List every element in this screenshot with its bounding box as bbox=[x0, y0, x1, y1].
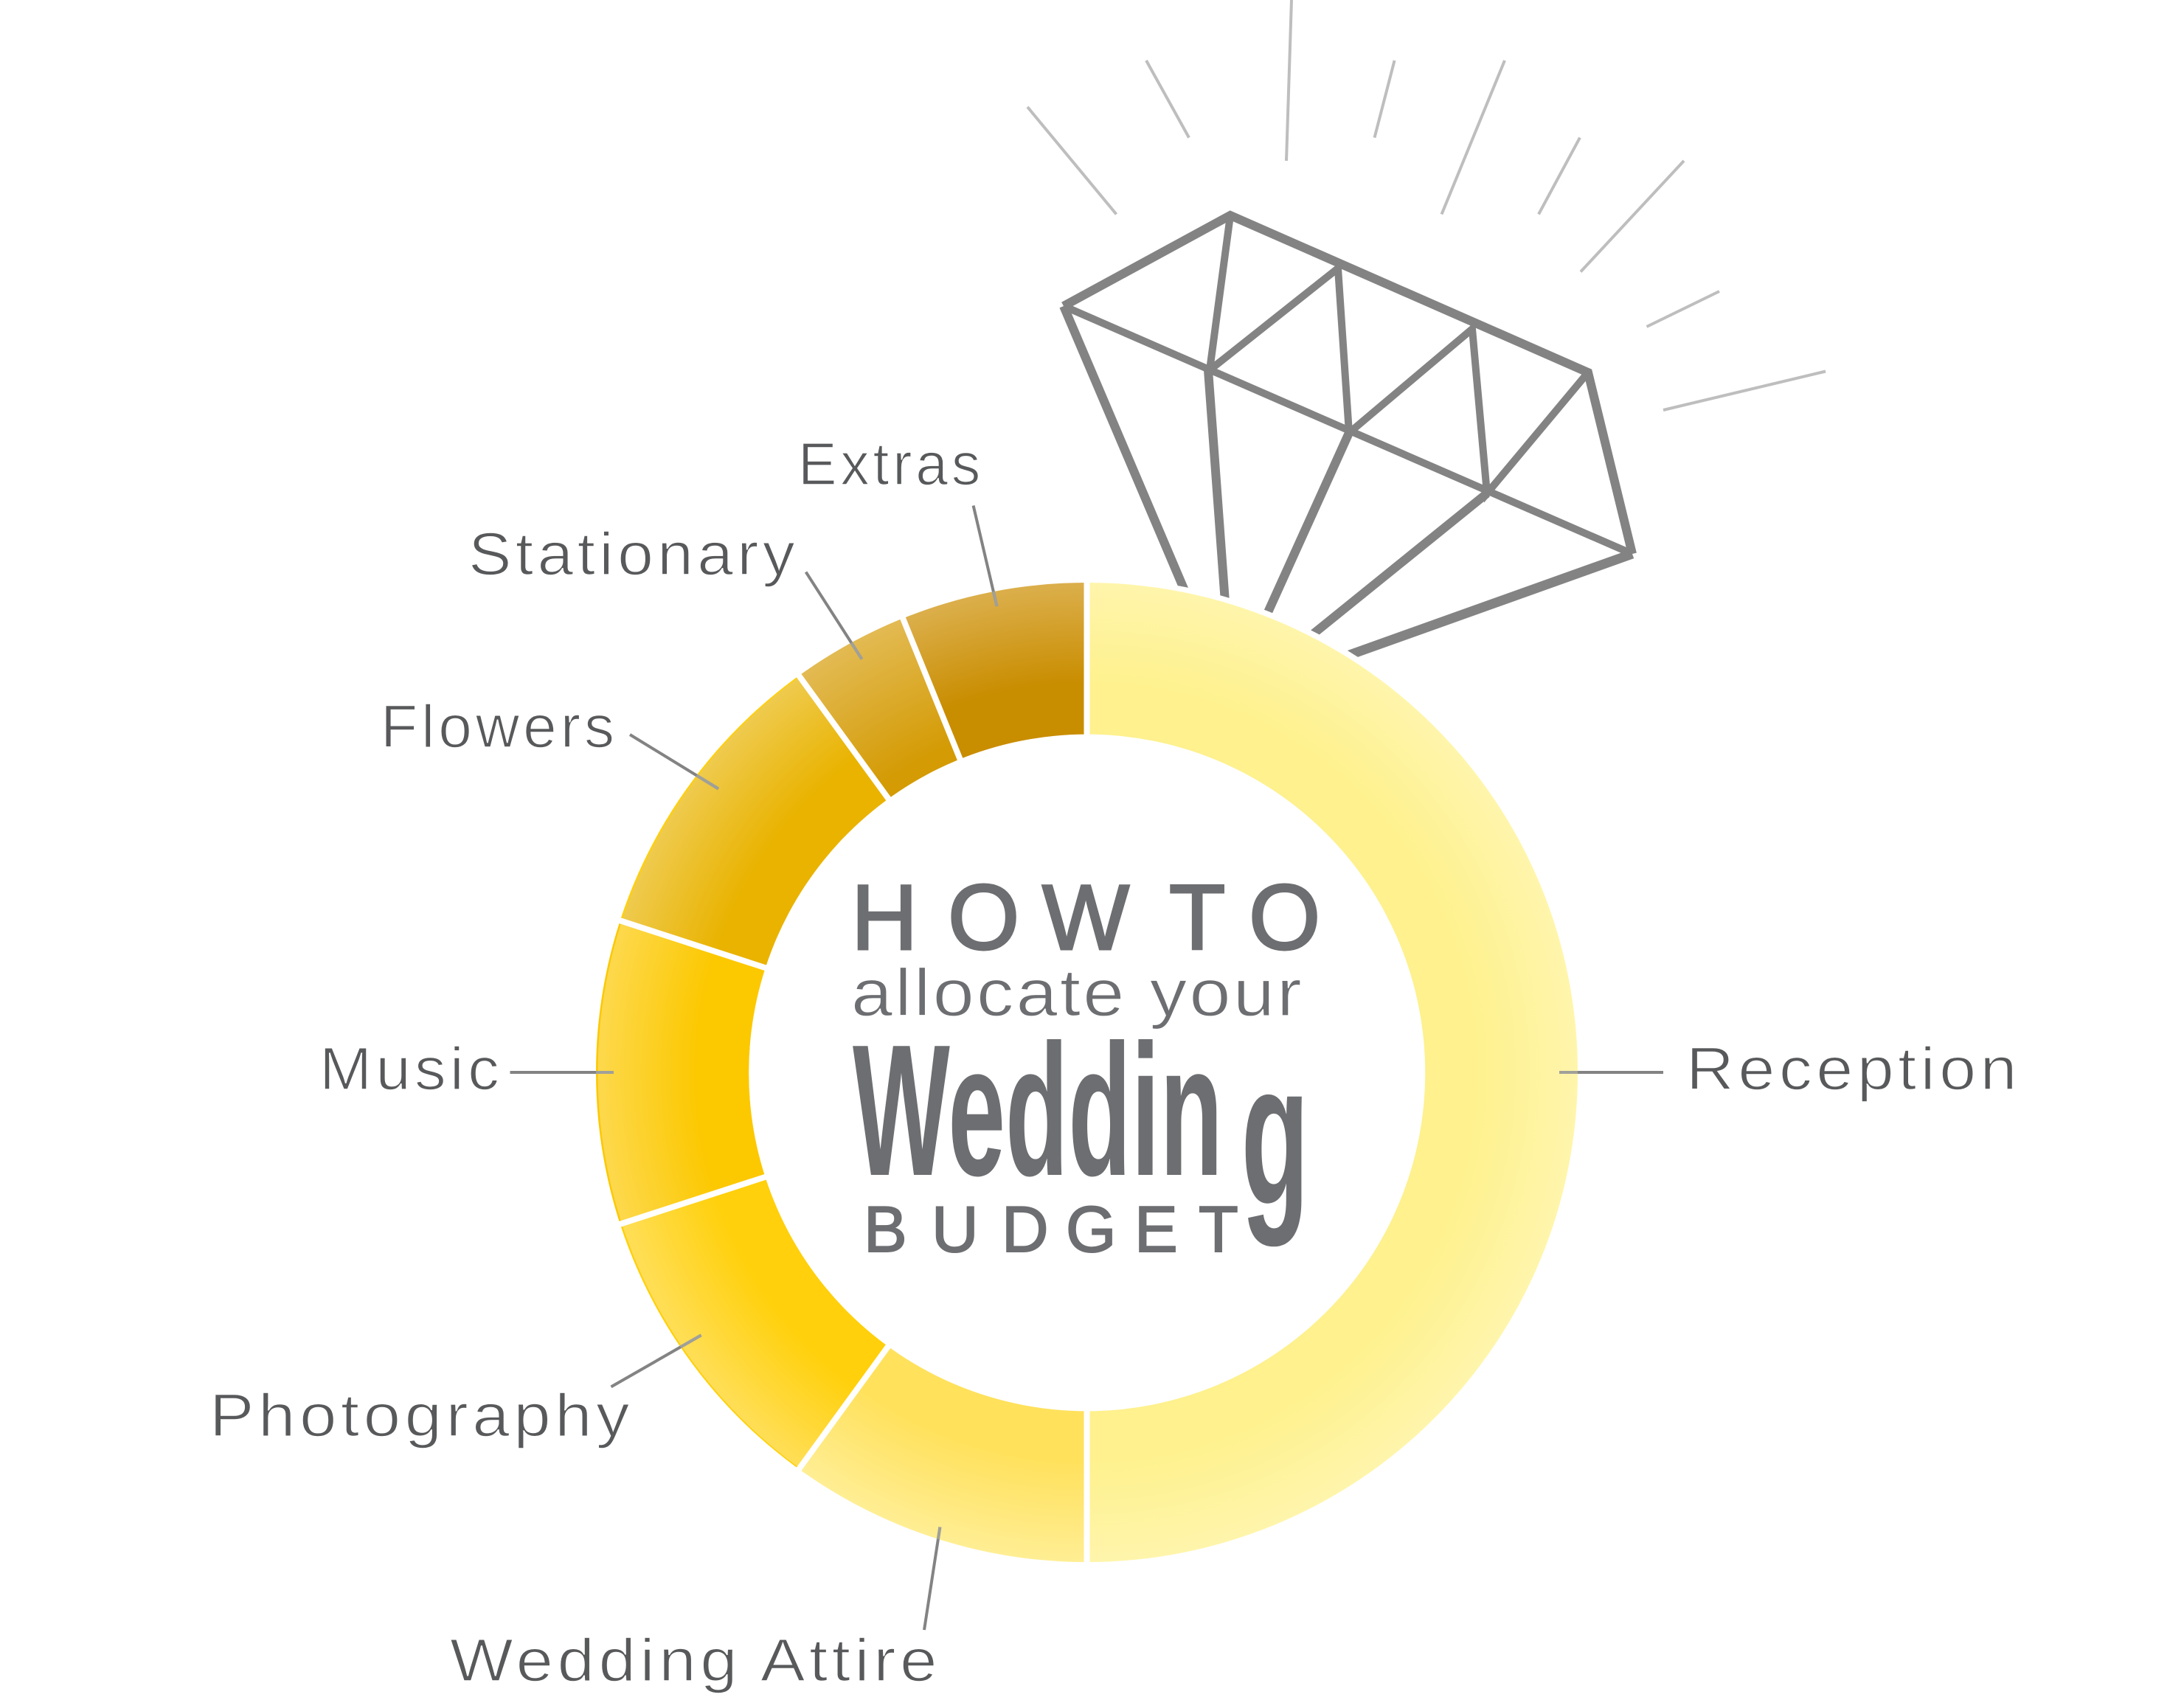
label: Photography: Photography bbox=[209, 1382, 634, 1449]
segment: Stationary bbox=[801, 620, 957, 797]
label: Stationary: Stationary bbox=[468, 521, 799, 588]
leader lines bbox=[510, 506, 1663, 1630]
segment: Photography bbox=[621, 1180, 886, 1468]
title line: allocate your: allocate your bbox=[851, 957, 1304, 1030]
icon: diamond bbox=[592, 215, 1632, 1567]
title bbox=[851, 867, 1320, 1266]
segment: Flowers bbox=[621, 677, 887, 965]
title line: Wedding: g bbox=[1241, 1021, 1309, 1247]
label: Music: Music bbox=[319, 1035, 503, 1103]
label: Extras: Extras bbox=[798, 431, 984, 498]
segment: Reception bbox=[1090, 583, 1578, 1562]
segment: Music bbox=[596, 923, 764, 1221]
label: Wedding Attire: Wedding Attire bbox=[450, 1627, 941, 1694]
title line: Wedding: Weddin bbox=[853, 1006, 1223, 1215]
icon: diamond sparkle rays bbox=[1027, 0, 1826, 410]
label: Flowers: Flowers bbox=[381, 693, 618, 760]
segment: Wedding Attire bbox=[801, 1348, 1084, 1562]
donut chart bbox=[596, 583, 1578, 1562]
label: Reception: Reception bbox=[1686, 1035, 2021, 1103]
segment: Extras bbox=[906, 583, 1084, 758]
title line: HOW TO: HOWTO bbox=[851, 867, 1320, 969]
title line: BUDGET: BUDGET bbox=[864, 1193, 1238, 1266]
